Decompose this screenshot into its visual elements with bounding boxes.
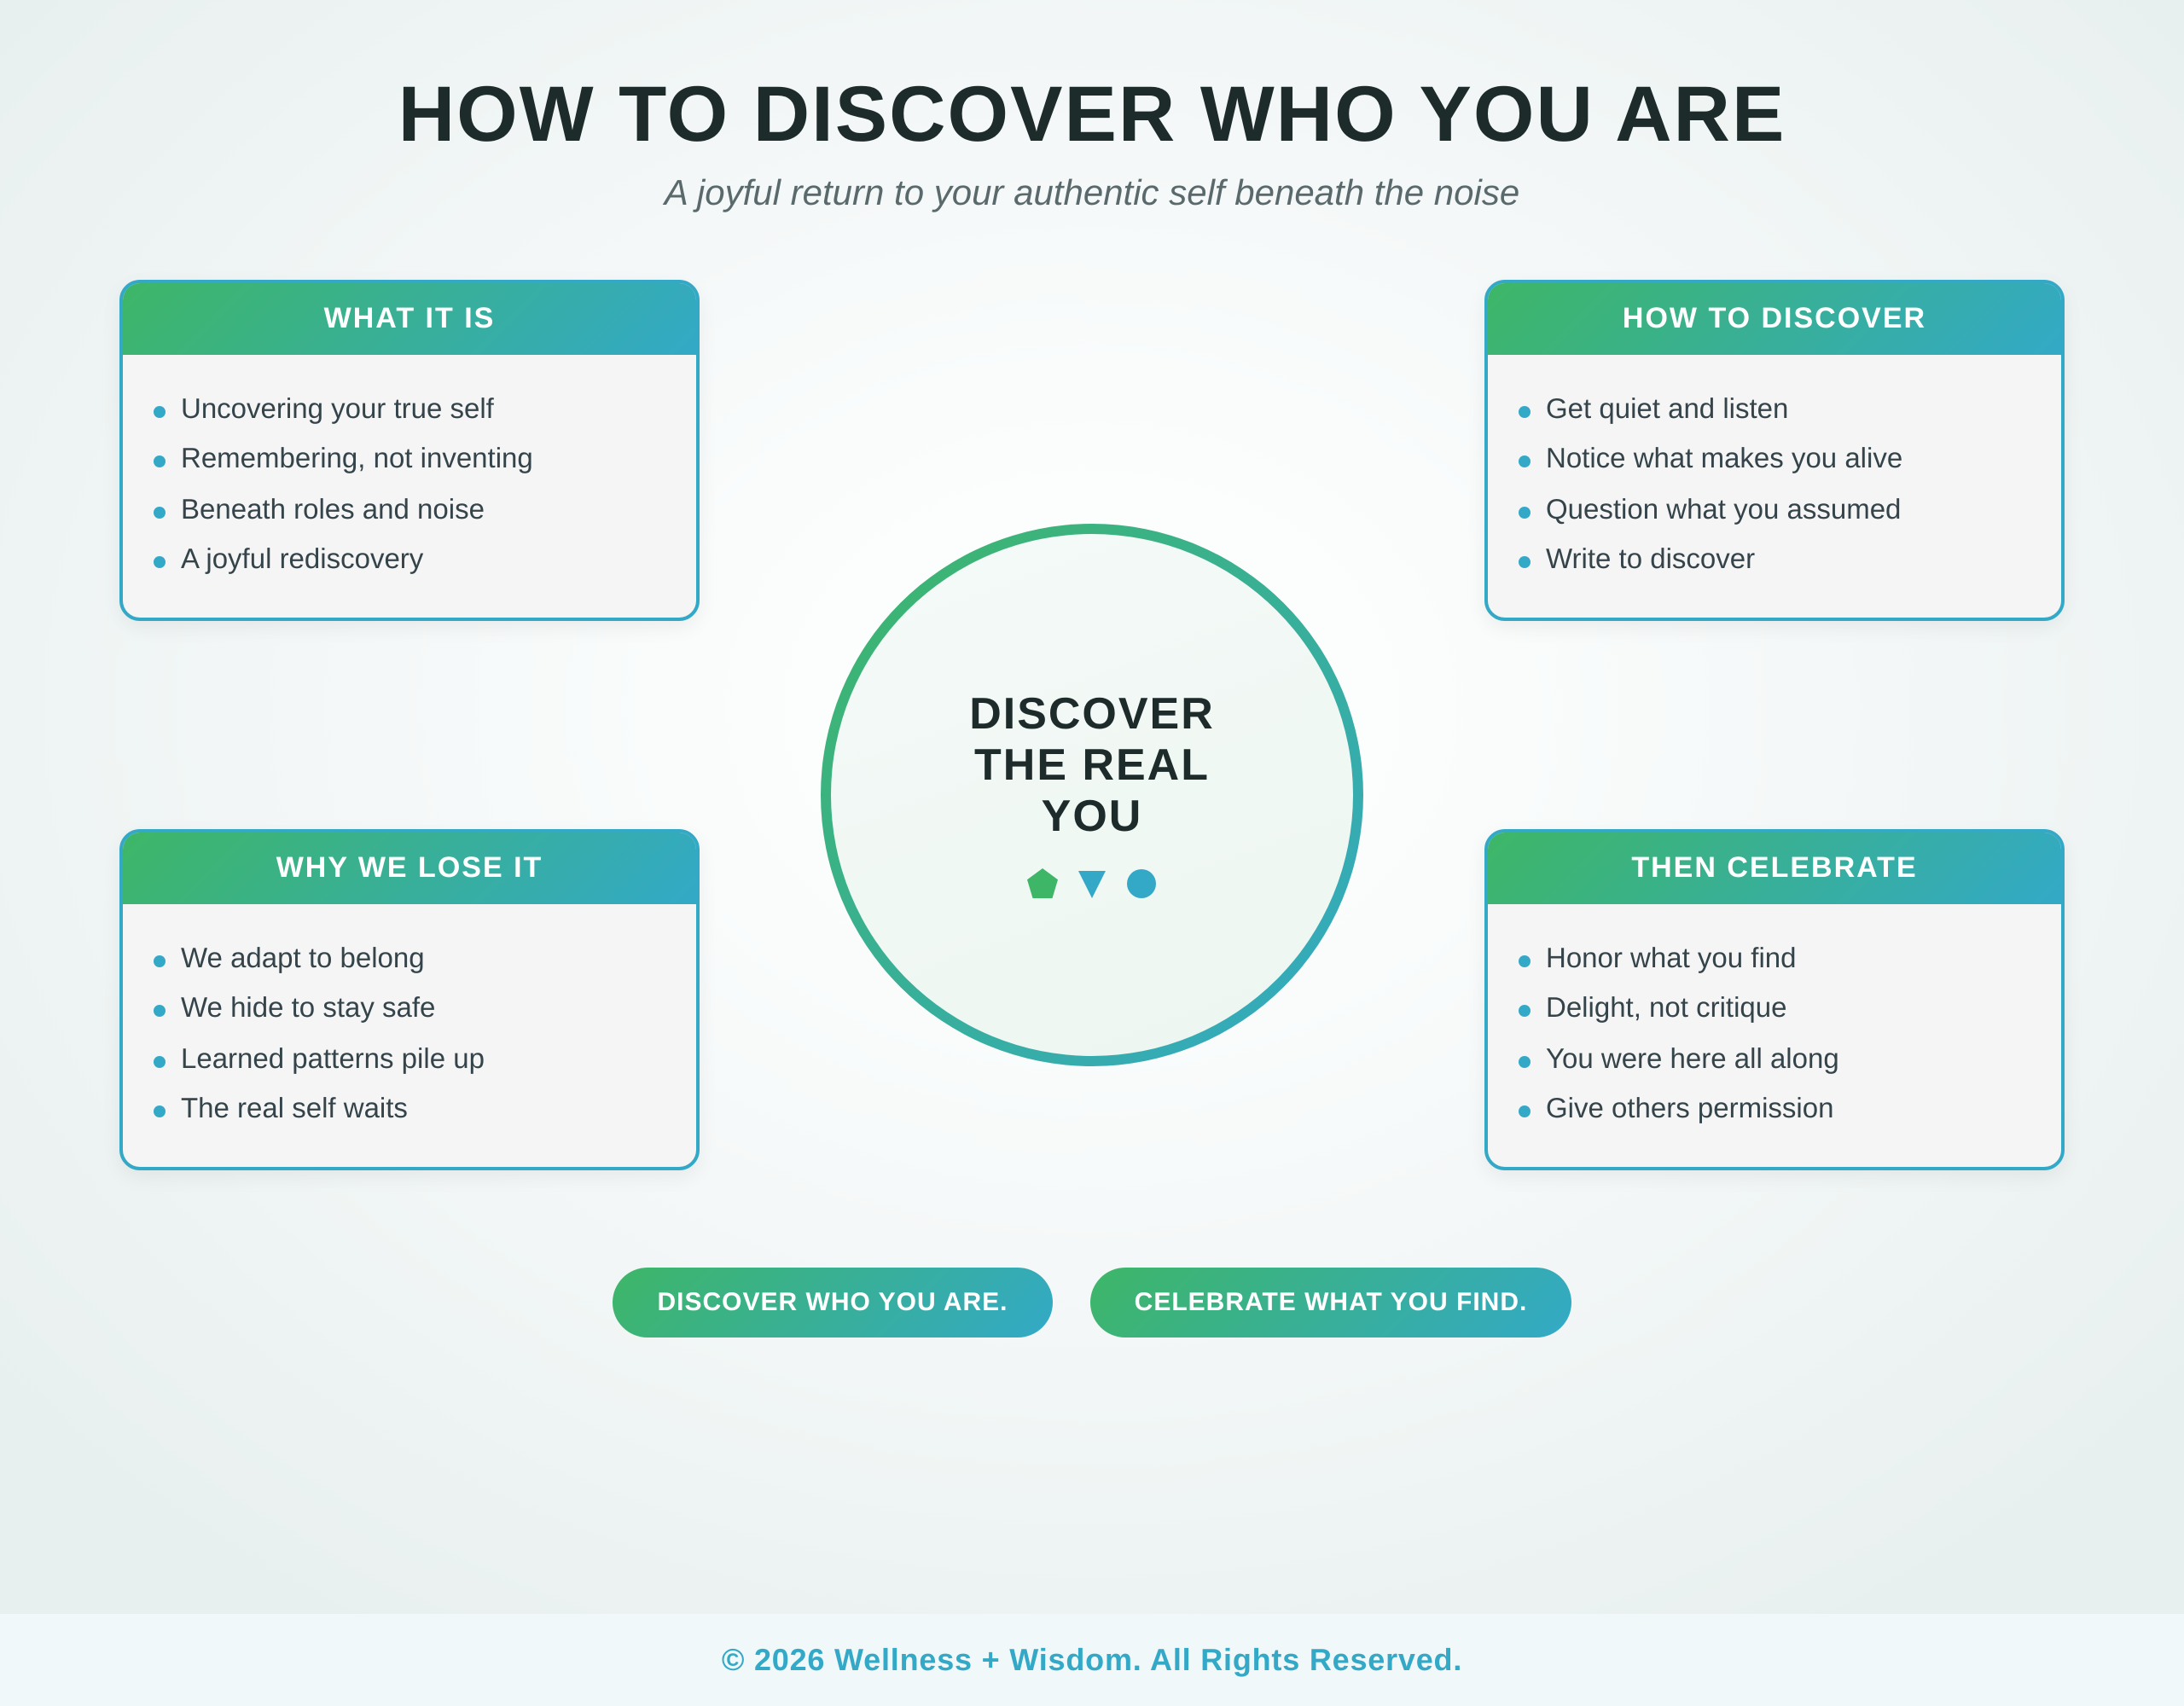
panel: then celebrate — [1484, 829, 2065, 1170]
central circle — [821, 524, 1363, 1066]
list item: We adapt to belong — [181, 942, 425, 973]
panel: what it is — [119, 280, 700, 621]
panel: how to discover — [1484, 280, 2065, 621]
list item: We hide to stay safe — [181, 991, 435, 1023]
button: celebrate what you find: CELEBRATE WHAT YOU FIND. — [1135, 1288, 1527, 1316]
subtitle: A joyful return to your authentic self beneath the noise — [665, 172, 1519, 212]
list item: Honor what you find — [1546, 942, 1797, 973]
heading: why we lose it: WHY WE LOSE IT — [276, 851, 543, 884]
central heading: DISCOVER — [969, 689, 1215, 739]
list item: A joyful rediscovery — [181, 543, 423, 574]
footer — [0, 1614, 2184, 1706]
list item: Question what you assumed — [1546, 493, 1901, 525]
list item: Write to discover — [1546, 543, 1755, 574]
list item: Give others permission — [1546, 1092, 1833, 1123]
heading: how to discover: HOW TO DISCOVER — [1623, 302, 1926, 334]
heading: then celebrate: THEN CELEBRATE — [1631, 851, 1918, 884]
list item: You were here all along — [1546, 1042, 1839, 1074]
button: discover who you are — [613, 1268, 1053, 1338]
central heading: YOU — [1042, 792, 1142, 841]
icon: pentagon — [1027, 868, 1058, 898]
heading: how to discover — [1488, 283, 2061, 355]
list item: Uncovering your true self — [181, 392, 494, 424]
central heading — [969, 689, 1215, 841]
icon: triangle — [1078, 871, 1106, 898]
icon: circle — [1127, 869, 1156, 898]
heading: what it is: WHAT IT IS — [324, 302, 495, 334]
list item: Learned patterns pile up — [181, 1042, 485, 1074]
list item: The real self waits — [181, 1092, 408, 1123]
list item: Remembering, not inventing — [181, 442, 533, 473]
list item: Get quiet and listen — [1546, 392, 1788, 424]
panel: why we lose it — [119, 829, 700, 1170]
heading: what it is — [123, 283, 696, 355]
heading: why we lose it — [123, 833, 696, 904]
button: discover who you are: DISCOVER WHO YOU ARE. — [657, 1288, 1008, 1316]
title: HOW TO DISCOVER WHO YOU ARE — [398, 71, 1786, 158]
list item: Beneath roles and noise — [181, 493, 485, 525]
central heading: THE REAL — [974, 740, 1210, 790]
list item: Delight, not critique — [1546, 991, 1786, 1023]
heading: then celebrate — [1488, 833, 2061, 904]
footer: © 2026 Wellness + Wisdom. All Rights Reserved. — [722, 1642, 1462, 1677]
list item: Notice what makes you alive — [1546, 442, 1902, 473]
button: celebrate what you find — [1090, 1268, 1571, 1338]
